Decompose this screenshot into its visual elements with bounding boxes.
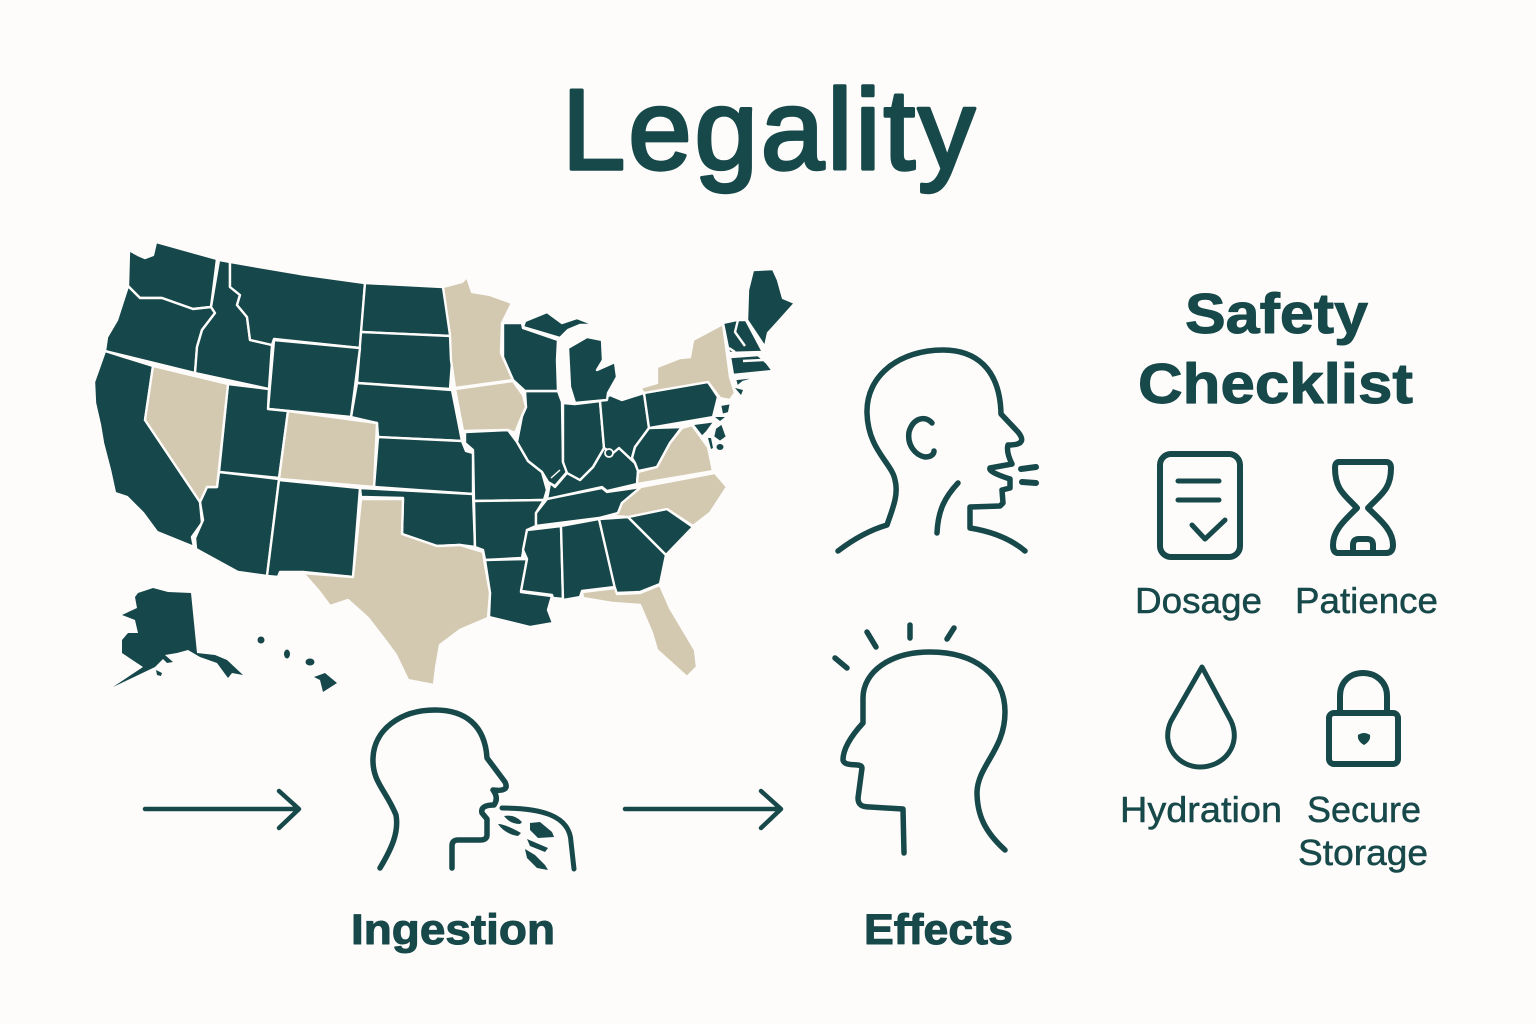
icon: dosage document [1160,454,1240,557]
state: Chesapeake sliver [708,438,713,449]
state: South Dakota [357,332,452,389]
state: Massachusetts [730,355,773,375]
state: Pennsylvania [644,382,718,428]
state: Maine [747,269,795,347]
state: Arizona [195,472,279,576]
state: Alabama [561,519,615,600]
title: Legality [562,67,975,194]
state: Oregon [105,286,215,373]
state: Delaware [713,423,727,442]
state: Long Island [735,388,743,395]
label: Secure Storage [1298,789,1428,873]
state: Missouri [465,430,547,501]
icon: head with radiating effects [835,625,1005,853]
icon: hydration drop [1168,667,1234,767]
state: Kentucky [547,448,638,499]
state: Idaho [195,260,272,389]
state: Connecticut and Rhode Island [735,376,763,387]
icon: ingestion head [373,710,574,870]
icon: secure storage lock [1329,673,1398,764]
state: North Carolina [610,473,727,526]
state: Louisiana [485,559,553,627]
state: Alaska small island [156,670,162,676]
state: Virginia [637,425,713,484]
label: Dosage: Dosage [1135,580,1262,621]
heading: Safety Checklist: Checklist [1138,352,1413,416]
heading: Safety Checklist: Safety [1185,282,1368,346]
state: New Mexico [267,480,360,577]
state: Wyoming [268,340,360,417]
state: Maryland [692,421,715,437]
label: Secure Storage: Secure [1307,789,1421,830]
state: Tennessee [536,487,641,526]
heading: Safety Checklist [1138,282,1413,416]
state: Wisconsin [503,323,558,391]
state: Texas [303,499,490,685]
state: Ohio [600,393,649,463]
state: Vermont and New Hampshire [723,320,763,353]
state: Utah [219,384,288,478]
state: Nevada [145,366,228,502]
state: Illinois [517,391,567,486]
state: Hawaii [258,636,337,692]
label: Ingestion: Ingestion [351,906,555,954]
state: Alaska [113,588,243,687]
state: New Jersey [720,403,731,415]
label: Effects: Effects [864,906,1013,954]
state: South Carolina [628,509,693,555]
state: Minnesota arrowhead sliver [511,303,525,311]
arrow: to effects [625,791,781,828]
state: Mississippi [521,526,563,599]
panel: tan states [145,277,735,685]
state: Michigan lower peninsula [568,337,617,403]
US map [94,242,795,692]
state: Florida [582,585,697,677]
icon: patience hourglass [1333,462,1393,553]
river loop: Kentucky detail [605,449,613,457]
state: Minnesota [443,277,513,388]
state: Colorado [279,411,377,487]
state: Iowa [455,381,526,433]
label: Secure Storage: Storage [1298,832,1428,873]
state: Arkansas [474,500,544,560]
state: Montana [230,262,365,348]
panel: dark states [94,242,795,692]
state: Indiana [563,401,604,480]
state: West Virginia [632,427,682,471]
state: Nebraska [351,383,462,441]
state: Kansas [374,437,473,494]
state: small mid-Atlantic shape [715,417,725,421]
label: Hydration: Hydration [1120,789,1282,830]
state: New York [640,324,735,400]
state: Washington [128,242,217,309]
river detail: southern Illinois [551,470,566,486]
state: Michigan upper peninsula [523,312,595,338]
arrow: to ingestion [145,791,299,828]
state: North Dakota [361,283,451,336]
state: Georgia [599,517,666,593]
state: coastal island [716,444,724,450]
icon: head speaking [838,350,1036,551]
state: Oklahoma [360,488,475,547]
state: California [94,351,202,547]
label: Patience: Patience [1295,580,1438,621]
